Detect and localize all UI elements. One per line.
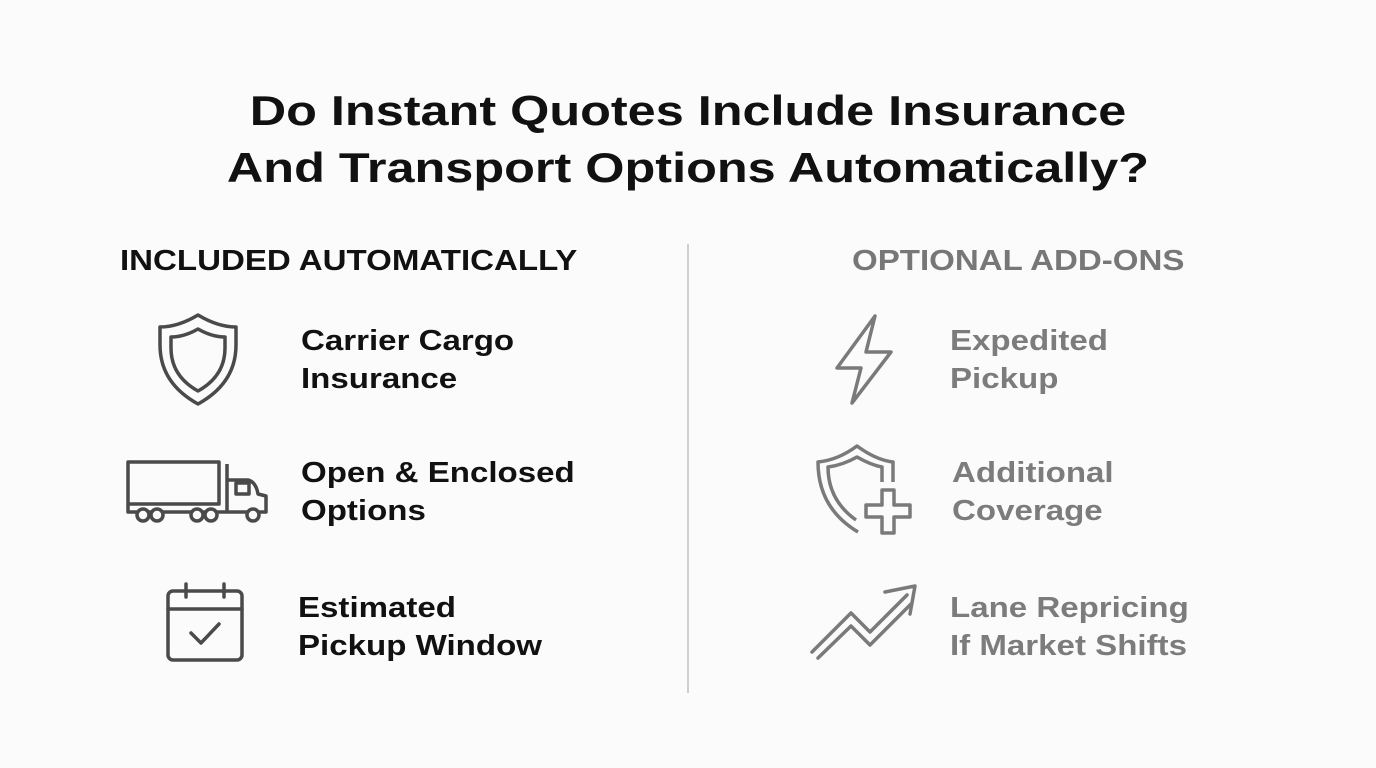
text: additional coverage: Coverage: [952, 495, 1103, 527]
text: carrier cargo insurance: [301, 325, 514, 395]
title: [227, 87, 1149, 191]
title: And Transport Options Automatically?: [227, 144, 1149, 191]
text: lane repricing: If Market Shifts: [950, 630, 1187, 662]
text: additional coverage: [952, 457, 1114, 527]
text: carrier cargo insurance: Insurance: [301, 363, 457, 395]
text: expedited pickup: [950, 325, 1108, 395]
text: estimated pickup window: Pickup Window: [298, 630, 542, 662]
text: expedited pickup: Expedited: [950, 325, 1108, 357]
icon: shield: [158, 313, 238, 406]
icon: lightning: [835, 314, 893, 405]
divider: [687, 244, 689, 693]
text: estimated pickup window: [298, 592, 542, 662]
icon: trend arrow: [810, 584, 917, 660]
text: carrier cargo insurance: Carrier Cargo: [301, 325, 514, 357]
text: lane repricing: Lane Repricing: [950, 592, 1189, 624]
heading: included automatically: INCLUDED AUTOMATICALLY: [120, 245, 577, 277]
text: additional coverage: Additional: [952, 457, 1114, 489]
heading: optional add-ons: OPTIONAL ADD-ONS: [852, 245, 1184, 277]
text: open & enclosed options: [301, 457, 575, 527]
text: open & enclosed options: Open & Enclosed: [301, 457, 575, 489]
text: estimated pickup window: Estimated: [298, 592, 456, 624]
icon: calendar: [166, 582, 244, 662]
text: lane repricing: [950, 592, 1189, 662]
text: expedited pickup: Pickup: [950, 363, 1058, 395]
text: open & enclosed options: Options: [301, 495, 426, 527]
title: Do Instant Quotes Include Insurance: [250, 87, 1126, 134]
icon: truck: [126, 460, 268, 523]
icon: shield plus: [816, 444, 912, 535]
